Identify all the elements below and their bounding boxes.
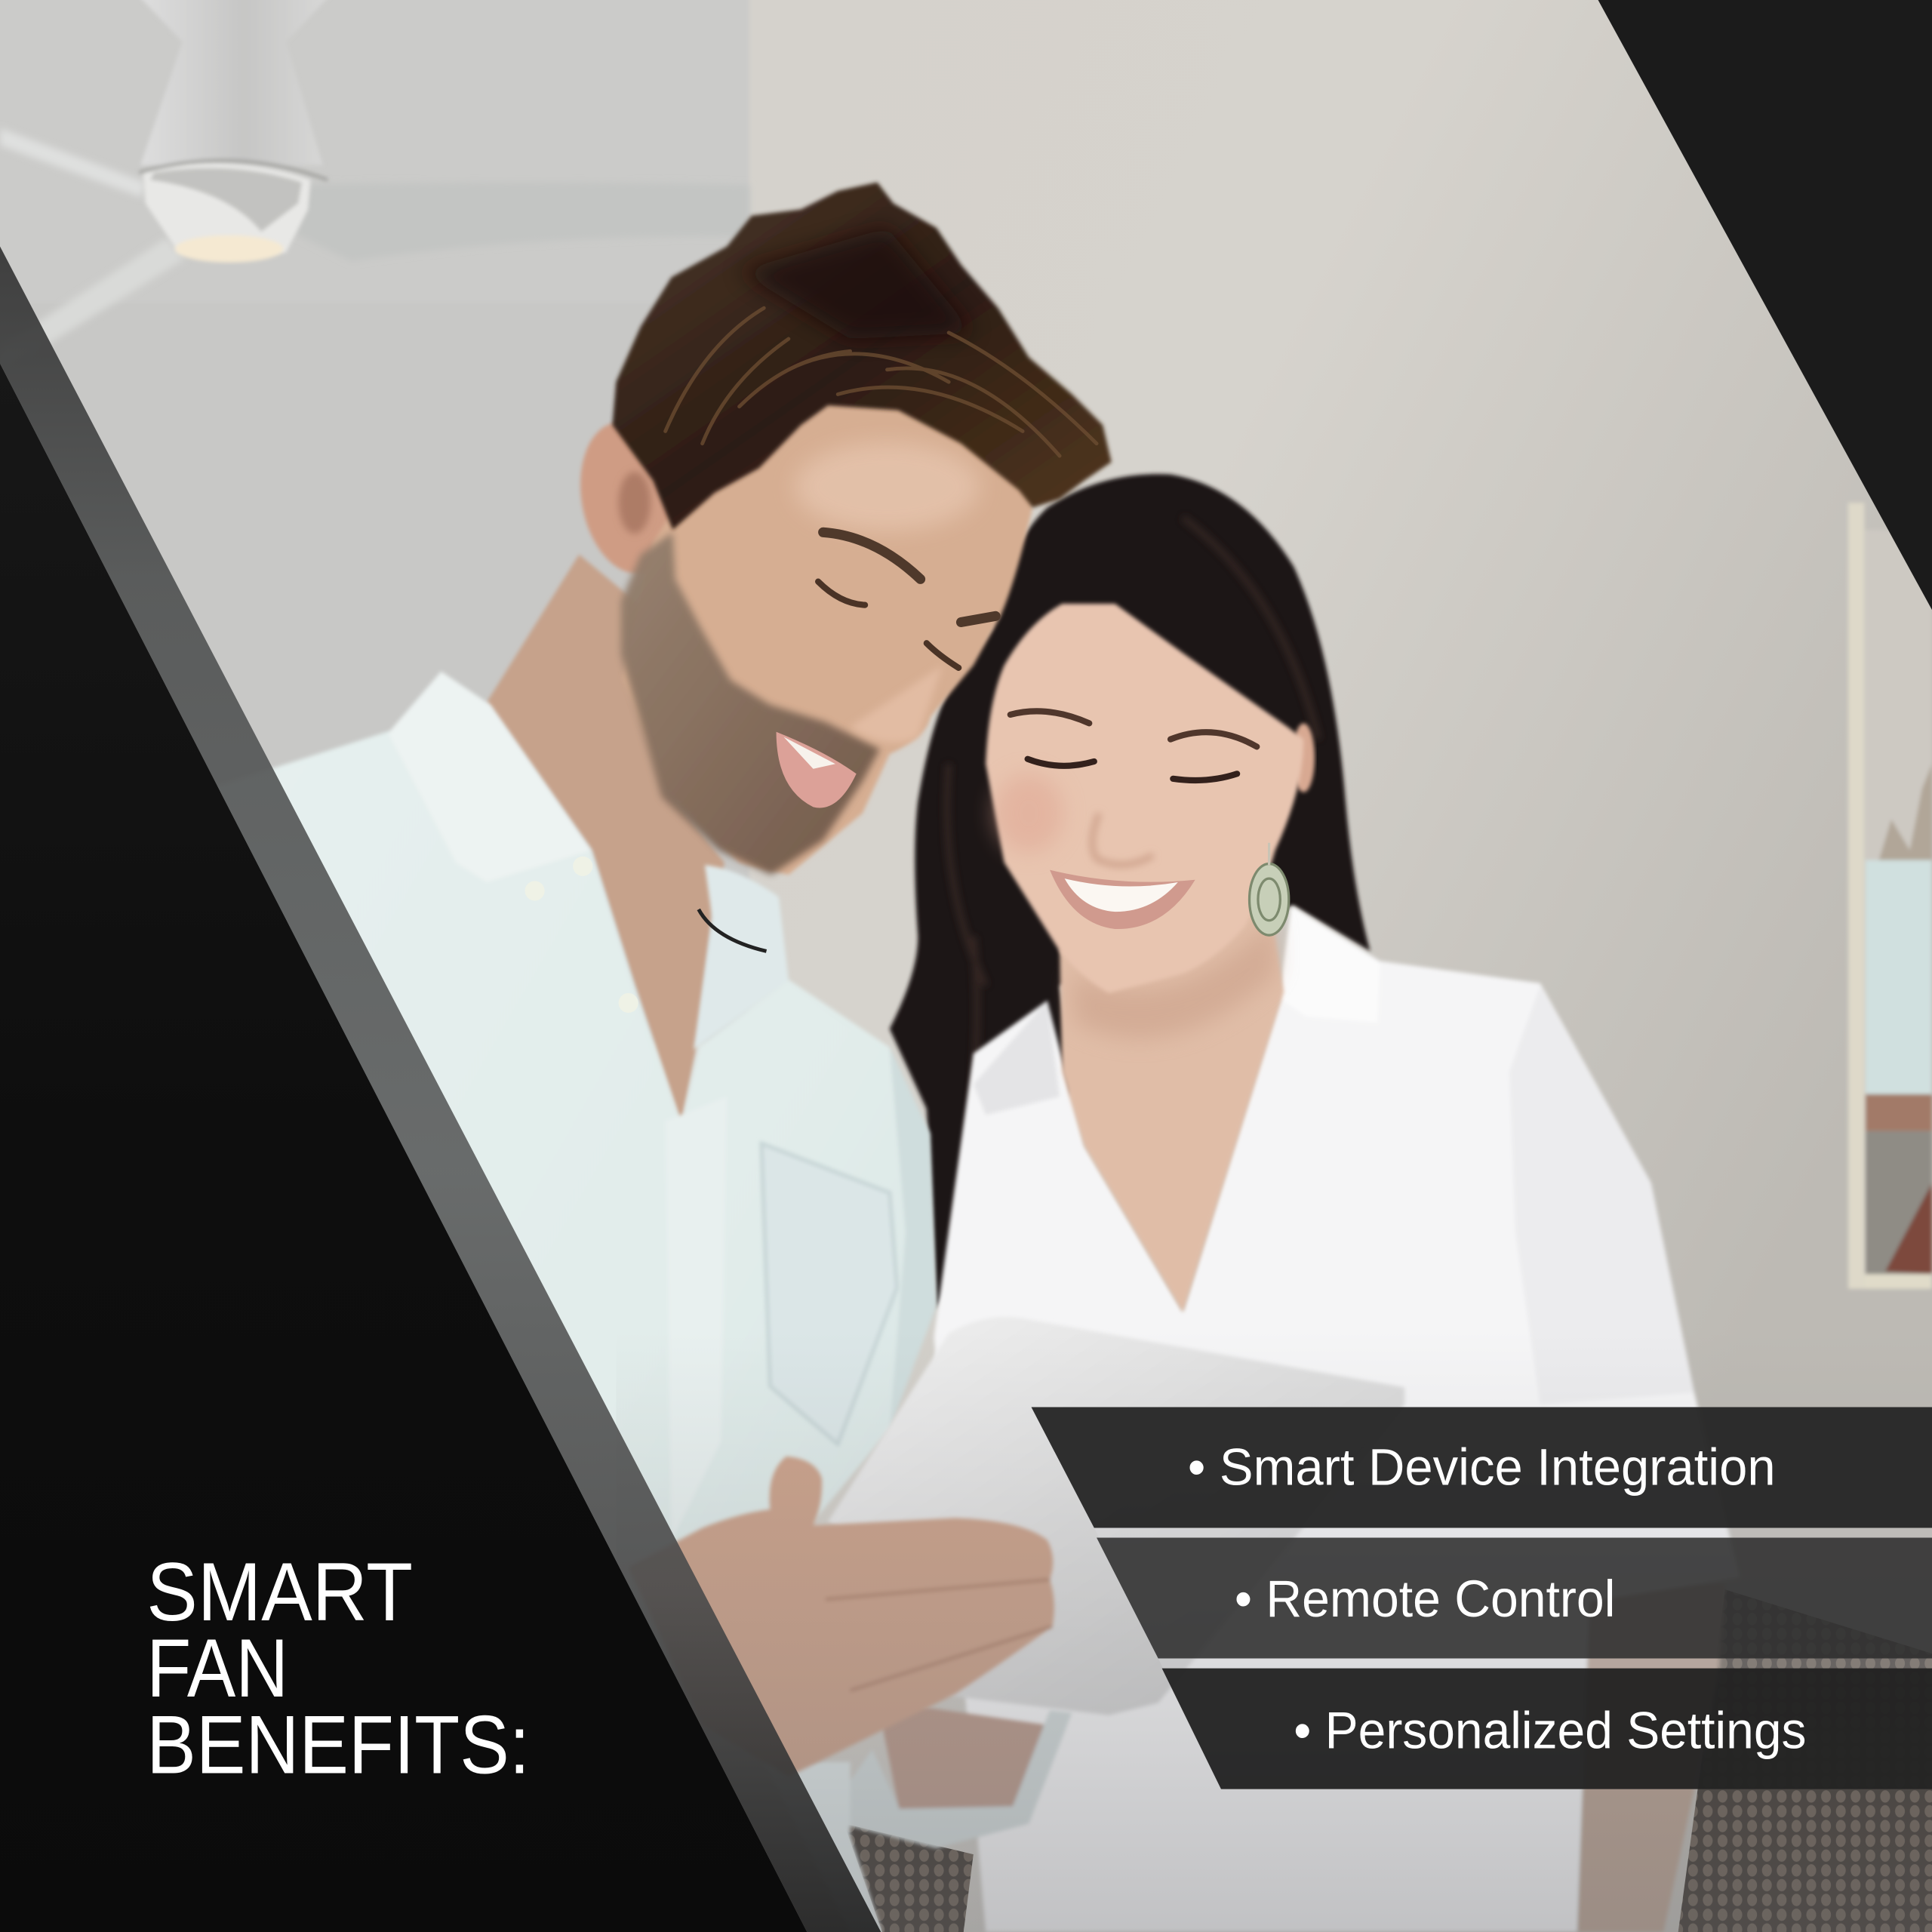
benefit bar: remote control	[1097, 1538, 1932, 1659]
man beard	[621, 532, 880, 875]
lower image fade	[616, 1331, 1932, 1932]
woman face	[986, 604, 1303, 993]
heading: smart fan benefits	[146, 1546, 530, 1791]
woman neck	[1060, 900, 1284, 1312]
hair strands	[666, 308, 1097, 456]
woman hair back	[890, 474, 1371, 1309]
man	[210, 183, 1112, 1932]
man mouth	[777, 732, 857, 808]
woman nose shadow	[1092, 814, 1153, 865]
man shirt pocket	[761, 1143, 897, 1444]
fan body	[138, 0, 331, 253]
man neck and chest	[487, 555, 724, 1124]
heading: smart fan benefits: FAN	[146, 1623, 288, 1715]
benefit bar: personalized settings: • Personalized Settings	[1294, 1702, 1806, 1760]
woman smile	[1050, 870, 1195, 929]
man shirt	[210, 672, 937, 1932]
woman eyes	[1028, 759, 1237, 780]
man face	[622, 382, 1032, 875]
man eyebrows	[823, 532, 995, 622]
ceiling fan	[0, 0, 749, 365]
dark corner: top right	[1598, 0, 1932, 610]
painting on right wall	[1848, 503, 1932, 1289]
man eyes	[818, 582, 958, 668]
woman shirt	[934, 906, 1740, 1932]
light separators between bars	[1094, 1527, 1932, 1669]
woman arm	[1577, 1583, 1725, 1932]
ceiling and recessed wall at left	[0, 0, 749, 1042]
woman neck shadow	[1072, 918, 1276, 1039]
translucent diagonal band	[0, 247, 881, 1932]
tablet	[828, 1317, 1404, 1715]
woman	[890, 474, 1740, 1932]
woman earring	[1250, 843, 1289, 935]
man ear	[569, 414, 688, 581]
woman hair highlights	[947, 518, 1318, 1232]
heading: smart fan benefits: BENEFITS:	[146, 1699, 530, 1791]
benefit bar: remote control: • Remote Control	[1235, 1570, 1615, 1628]
cushions	[844, 1589, 1932, 1932]
man hair	[612, 183, 1112, 530]
benefit bar: smart device integration: • Smart Device Integration	[1188, 1438, 1776, 1496]
dark panel: bottom left	[0, 364, 807, 1932]
woman cheek blush	[995, 774, 1063, 853]
woman ear	[1293, 723, 1315, 792]
man hand holding tablet	[629, 1457, 1054, 1777]
benefit bar: smart device integration	[1032, 1407, 1932, 1527]
man forehead highlight	[795, 442, 980, 531]
woman eyebrows	[1011, 711, 1257, 746]
heading: smart fan benefits: SMART	[146, 1546, 413, 1638]
necklace cord	[699, 909, 767, 951]
fan blades	[0, 128, 749, 365]
man shirt buttons	[525, 857, 638, 1013]
man cuff and woman forearm	[764, 1700, 1072, 1932]
fan light	[175, 235, 284, 263]
benefit bar: personalized settings	[1162, 1669, 1932, 1789]
man nose	[851, 666, 943, 743]
